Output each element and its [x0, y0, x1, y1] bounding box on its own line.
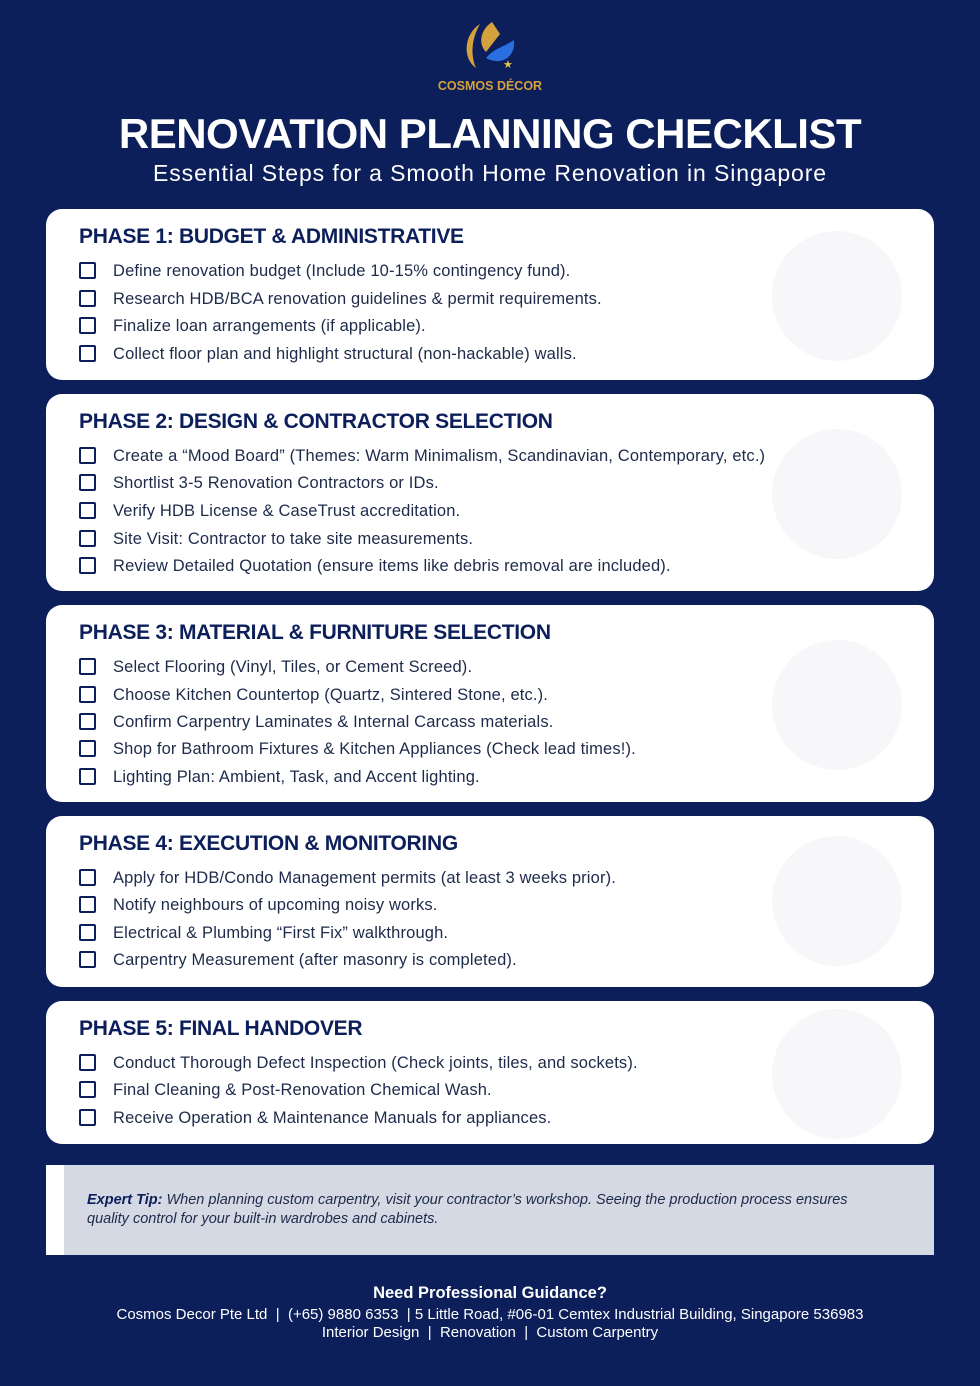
panel: phase 5: PHASE 5: FINAL HANDOVER — [79, 1017, 362, 1040]
panel: phase 2: Review Detailed Quotation (ensure items like debris removal are included). — [113, 557, 671, 575]
panel: phase 2: Shortlist 3-5 Renovation Contractors or IDs. — [113, 474, 439, 492]
panel: phase 4 — [46, 816, 934, 987]
panel: phase 1: PHASE 1: BUDGET & ADMINISTRATIVE — [79, 225, 464, 248]
panel: phase 2: Verify HDB License & CaseTrust accreditation. — [113, 502, 460, 520]
panel: phase 2: Create a “Mood Board” (Themes: Warm Minimalism, Scandinavian, Contemporary, etc.) — [113, 447, 765, 465]
panel: phase 3: PHASE 3: MATERIAL & FURNITURE SELECTION — [79, 621, 551, 644]
logo: COSMOS DÉCOR — [438, 79, 542, 93]
title: RENOVATION PLANNING CHECKLIST — [119, 110, 861, 157]
panel: phase 4: Notify neighbours of upcoming noisy works. — [113, 896, 438, 914]
panel: phase 1 — [46, 209, 934, 380]
panel: phase 2: PHASE 2: DESIGN & CONTRACTOR SELECTION — [79, 410, 553, 433]
footer: Cosmos Decor Pte Ltd | (+65) 9880 6353 | 5 Little Road, #06-01 Cemtex Industrial Building, Singapore 536983 — [116, 1306, 864, 1323]
panel: phase 4: Carpentry Measurement (after masonry is completed). — [113, 951, 517, 969]
panel: phase 5 — [46, 1001, 934, 1144]
panel: phase 1: Collect floor plan and highlight structural (non-hackable) walls. — [113, 345, 577, 363]
callout: expert tip — [46, 1165, 934, 1255]
panel: phase 1: Finalize loan arrangements (if applicable). — [113, 317, 426, 335]
panel: phase 3: Lighting Plan: Ambient, Task, and Accent lighting. — [113, 768, 480, 786]
logo: ★ — [503, 59, 513, 71]
panel: phase 2: Site Visit: Contractor to take site measurements. — [113, 530, 473, 548]
panel: phase 4: PHASE 4: EXECUTION & MONITORING — [79, 832, 458, 855]
panel: phase 1: Research HDB/BCA renovation guidelines & permit requirements. — [113, 290, 602, 308]
panel: phase 4: Apply for HDB/Condo Management permits (at least 3 weeks prior). — [113, 869, 616, 887]
subtitle: Essential Steps for a Smooth Home Renovation in Singapore — [153, 160, 827, 186]
panel: phase 5: Final Cleaning & Post-Renovation Chemical Wash. — [113, 1081, 492, 1099]
panel: phase 3: Select Flooring (Vinyl, Tiles, or Cement Screed). — [113, 658, 472, 676]
panel: phase 3: Confirm Carpentry Laminates & Internal Carcass materials. — [113, 713, 553, 731]
logo — [438, 22, 542, 93]
panel: phase 5: Conduct Thorough Defect Inspection (Check joints, tiles, and sockets). — [113, 1054, 638, 1072]
footer: Need Professional Guidance? — [373, 1284, 607, 1302]
panel: phase 3: Shop for Bathroom Fixtures & Kitchen Appliances (Check lead times!). — [113, 740, 636, 758]
footer — [116, 1284, 864, 1341]
footer: Interior Design | Renovation | Custom Carpentry — [322, 1324, 658, 1341]
panel: phase 5: Receive Operation & Maintenance Manuals for appliances. — [113, 1109, 551, 1127]
panel: phase 2 — [46, 394, 934, 591]
panel: phase 3 — [46, 605, 934, 802]
callout: expert tip: Expert Tip: When planning custom carpentry, visit your contractor’s workshop. Seeing the production process ensures quality control for your built-in wardrobes and cabinets. — [87, 1192, 848, 1227]
panel: phase 1: Define renovation budget (Include 10-15% contingency fund). — [113, 262, 570, 280]
panel: phase 3: Choose Kitchen Countertop (Quartz, Sintered Stone, etc.). — [113, 686, 548, 704]
panel: phase 4: Electrical & Plumbing “First Fix” walkthrough. — [113, 924, 448, 942]
